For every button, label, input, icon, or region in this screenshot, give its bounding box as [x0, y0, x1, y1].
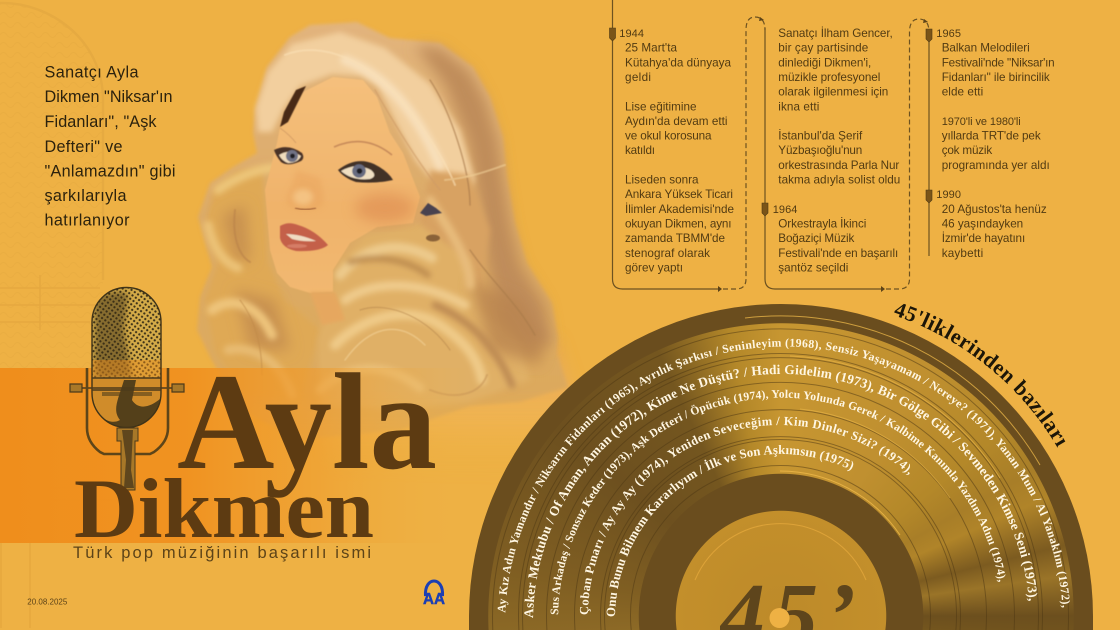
record label ring and spindle hole: [695, 524, 866, 628]
song list on the record: Sus Arkadaş / Sonsuz Keder (1973), Aşk Defteri / Öpücük (1974), Yolcu Yolunda Gerek / Kalbime Kanımla Yazdım Adını (1974),: [550, 390, 1006, 614]
timeline column 3: çok müzik: [942, 144, 992, 157]
microphone head with grille: [92, 288, 161, 432]
neck: [313, 292, 340, 322]
fine hair strands: [234, 50, 535, 395]
blush: [355, 193, 415, 223]
record grooves: [492, 329, 1068, 630]
tan side locks: [428, 168, 490, 245]
timeline column 1: Kütahya'da dünyaya: [625, 56, 731, 69]
intro text: Fidanları", "Aşk: [44, 113, 157, 131]
timeline column 3: kaybetti: [942, 247, 983, 260]
lower centre and right curls: [318, 225, 530, 410]
timeline column 2: müzikle profesyonel: [778, 71, 880, 84]
song list on the record: Çoban Pınarı / Ay Ay Ay (1974), Yeniden Seveceğim / Kim Dinler Sizi? (1974),: [580, 416, 910, 614]
lips: [280, 223, 328, 251]
microphone stem: [117, 428, 138, 490]
timeline column 2: ikna etti: [778, 100, 819, 113]
subtitle: Türk pop müziğinin başarılı ismi: [73, 544, 371, 562]
timeline column 3: programında yer aldı: [942, 159, 1050, 172]
timeline column 1: Ankara Yüksek Ticari: [625, 188, 733, 201]
right eye: [334, 142, 393, 183]
timeline connector lines: [612, 0, 929, 292]
arrowheads: [718, 17, 928, 292]
intro text: Dikmen "Niksar'ın: [44, 88, 172, 106]
timeline column 1: ve okul korosuna: [625, 130, 712, 143]
timeline column 1: Lise eğitimine: [625, 100, 696, 113]
intro text: şarkılarıyla: [44, 187, 126, 205]
record highlights: [745, 316, 1040, 535]
intro text: [44, 63, 176, 230]
timeline column 1: görev yaptı: [625, 261, 683, 274]
face: [265, 77, 420, 293]
timeline column 3: 20 Ağustos'ta henüz: [942, 203, 1047, 216]
timeline column 3: elde etti: [942, 86, 983, 99]
timeline column 3: 1970'li ve 1980'li: [942, 116, 1021, 128]
timeline column 3: yıllarda TRT'de pek: [942, 130, 1041, 143]
title: Ayla: Ayla: [177, 345, 437, 498]
timeline column 2: Sanatçı İlham Gencer,: [778, 27, 893, 40]
icon: agency logo: [423, 581, 445, 608]
orange title band: [0, 368, 470, 543]
lower left hair curls: [206, 172, 316, 368]
timeline column 1: 25 Mart'ta: [625, 42, 677, 55]
hair silhouette: [197, 22, 568, 440]
timeline column 2: olarak ilgilenmesi için: [778, 86, 888, 99]
timeline column 2: şantöz seçildi: [778, 261, 848, 274]
microphone pins: [70, 384, 184, 392]
light hair sweep: [256, 32, 475, 205]
title: Dikmen: Dikmen: [74, 462, 374, 556]
timeline column 3: 46 yaşındayken: [942, 217, 1023, 230]
timeline column 3: 1990: [936, 189, 961, 201]
left eye: [274, 128, 303, 164]
timeline column 2: [773, 27, 900, 274]
timeline column 3: Fidanları" ile birincilik: [942, 71, 1050, 84]
icon: agency logo: AA: [423, 591, 445, 608]
microphone cross bars: [82, 378, 172, 390]
background decoration: faint microphone and sheet lines: [0, 3, 120, 628]
nose: [296, 174, 318, 200]
timeline column 1: Aydın'da devam etti: [625, 115, 728, 128]
timeline column 2: Boğaziçi Müzik: [778, 232, 854, 245]
shoulder and chest: [429, 348, 572, 427]
timeline column 1: stenograf olarak: [625, 247, 710, 260]
timeline markers: [610, 28, 932, 216]
timeline column 1: katıldı: [625, 144, 655, 157]
intro text: "Anlamazdın" gibi: [44, 162, 176, 180]
timeline column 2: takma adıyla solist oldu: [778, 174, 900, 186]
darker right hair mass: [415, 46, 552, 345]
timeline column 2: dinlediği Dikmen'i,: [778, 56, 871, 69]
timeline column 1: zamanda TBMM'de: [625, 232, 725, 245]
portrait of Ayla Dikmen: [196, 20, 572, 432]
timeline column 2: bir çay partisinde: [778, 42, 868, 55]
intro text: Defteri" ve: [44, 138, 122, 156]
timeline column 2: Yüzbaşıoğlu'nun: [778, 144, 862, 157]
timeline column 3: Festivali'nde "Niksar'ın: [942, 56, 1055, 69]
timeline column 1: [619, 28, 734, 274]
timeline column 2: orkestrasında Parla Nur: [778, 159, 899, 172]
timeline column 1: okuyan Dikmen, aynı: [625, 217, 732, 230]
timeline column 3: 1965: [936, 28, 961, 40]
timeline column 2: Festivali'nde en başarılı: [778, 247, 898, 260]
broad hair locks: [208, 60, 512, 395]
song list on the record: Ay Kız Adın Yamandır / Niksarın Fidanları (1965), Ayrılık Şarkısı / Seninleyim (1968), Sensiz Yaşayamam / Nereye? (1971), Yanan Mum / Al Yanaklım (1972),: [498, 338, 1070, 613]
microphone cradle: [87, 368, 168, 454]
timeline column 2: 1964: [773, 204, 797, 216]
timeline column 1: İlimler Akademisi'nde: [625, 203, 734, 216]
microphone illustration: [70, 288, 184, 490]
intro text: Sanatçı Ayla: [44, 63, 138, 81]
song list on the record: Asker Mektubu / Of Aman, Aman (1972), Kime Ne Düştü? / Hadi Gidelim (1973), Bir Gölge Gibi / Sevmeden Kimse Seni (1973),: [524, 364, 1038, 618]
curved heading: 45'liklerinden bazıları: 45'liklerinden bazıları: [894, 304, 1066, 448]
timeline column 3: Balkan Melodileri: [942, 42, 1030, 55]
date: 20.08.2025: [27, 598, 68, 607]
timeline column 3: İzmir'de hayatını: [942, 232, 1025, 245]
timeline column 1: Liseden sonra: [625, 174, 699, 186]
timeline column 2: Orkestrayla İkinci: [778, 217, 866, 230]
timeline column 3: [936, 28, 1055, 260]
vinyl record disc: [468, 304, 1092, 630]
timeline column 2: İstanbul'da Şerif: [778, 130, 863, 143]
timeline column 1: 1944: [619, 28, 644, 40]
intro text: hatırlanıyor: [44, 212, 130, 230]
song list on the record: Onu Bunu Bilmem Kararlıyım / İlk ve Son Aşkımsın (1975): [606, 445, 854, 616]
dark hair accents: [280, 86, 306, 127]
timeline column 1: geldi: [625, 71, 651, 84]
